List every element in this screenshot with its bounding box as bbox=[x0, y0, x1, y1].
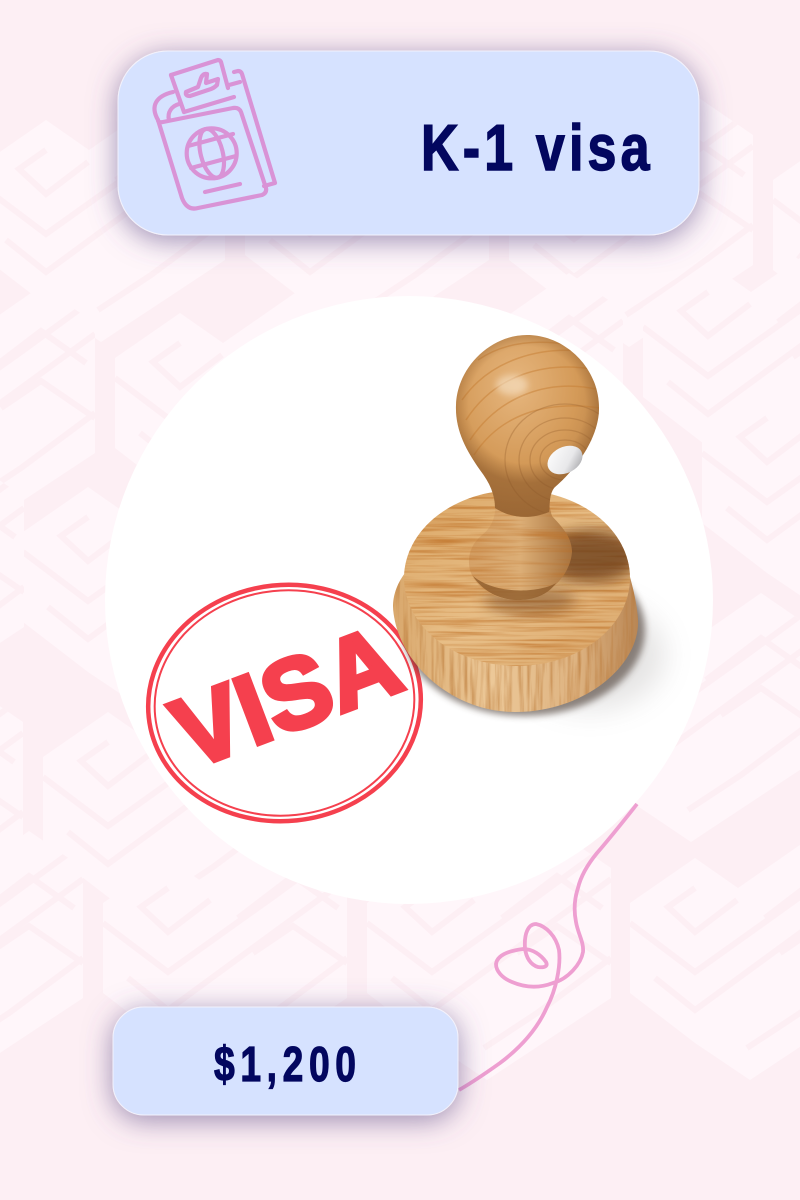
stamp base top bbox=[404, 490, 630, 666]
stamp base side bbox=[393, 500, 638, 712]
header panel: K-1 visa bbox=[118, 51, 699, 235]
header pill background bbox=[118, 51, 699, 235]
illustration: wooden stamp bbox=[393, 330, 665, 716]
price value: $1,200 bbox=[214, 1038, 362, 1092]
stamp outer rings bbox=[136, 571, 433, 835]
heading: K-1 visa: K-1 visa bbox=[421, 113, 654, 184]
metal button bbox=[543, 440, 587, 480]
connector curve bbox=[459, 804, 637, 1090]
icon: passport with ticket bbox=[154, 60, 275, 209]
illustration: red VISA stamp imprint bbox=[136, 571, 433, 835]
foot underside shade bbox=[473, 576, 556, 600]
stamp handle ball bbox=[456, 335, 599, 517]
white photo circle bbox=[105, 296, 713, 904]
base cast shadow bbox=[484, 530, 640, 614]
price pill background bbox=[113, 1007, 458, 1115]
stamp word VISA: VISA bbox=[158, 604, 415, 791]
stamp handle foot and neck bbox=[469, 488, 572, 600]
price panel bbox=[113, 1007, 458, 1115]
ground shadow bbox=[403, 544, 665, 716]
